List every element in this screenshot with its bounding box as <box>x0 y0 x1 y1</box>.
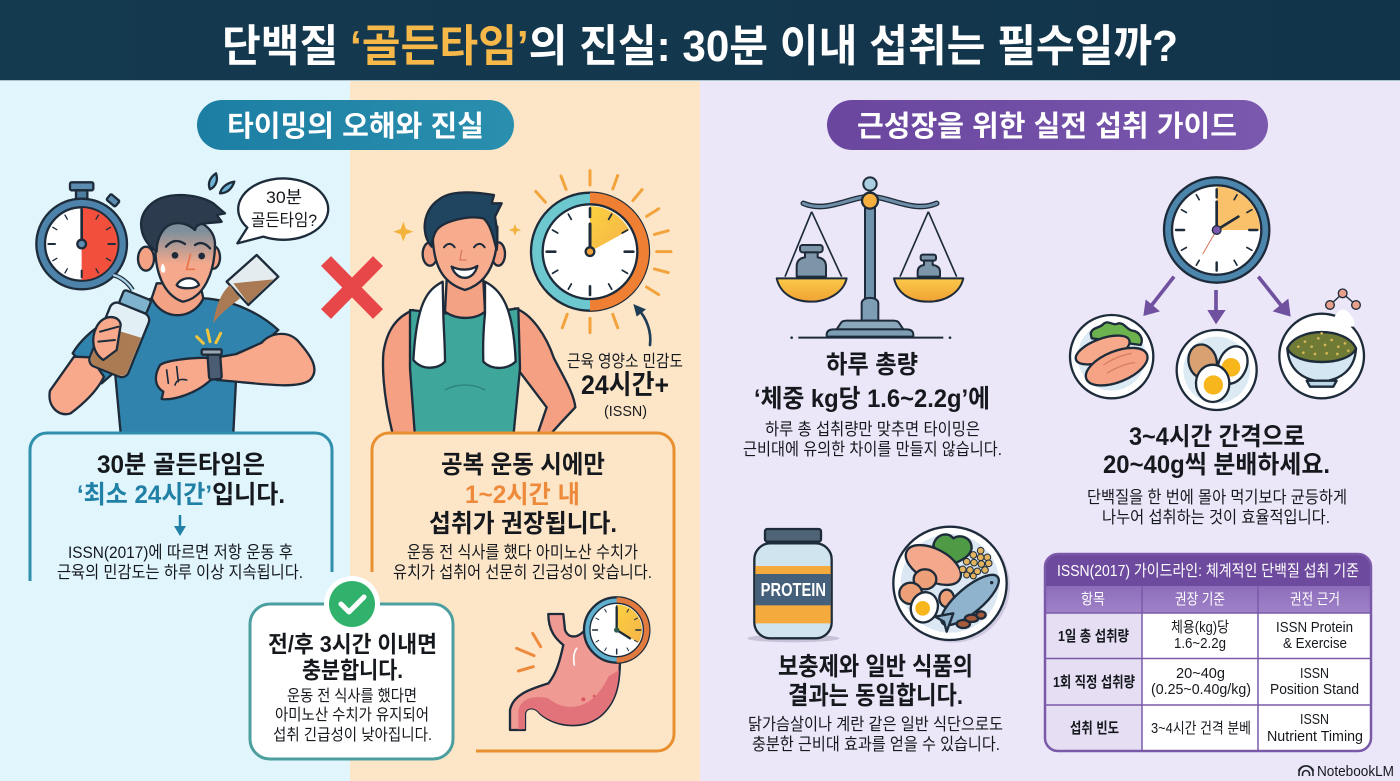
icon: red X <box>326 261 378 314</box>
tank top <box>410 308 520 437</box>
NotebookLM logo: NotebookLM <box>1317 764 1394 780</box>
panel: fasted training card: 유치가 섭취어 선문히 긴급성이 앚습니다. <box>393 563 652 582</box>
illustration: smiling man with towel and clock <box>383 171 671 437</box>
table row: per-meal dose: 20~40g <box>1176 665 1225 682</box>
panel: fasted training card: 운동 전 식사를 했다 아미노산 수치가 <box>407 543 638 562</box>
neck <box>445 280 485 318</box>
table row: frequency: ISSN <box>1300 711 1329 728</box>
protein shaker <box>87 287 157 379</box>
speech bubble text: 골든타임? <box>251 211 317 230</box>
table row: daily total <box>1058 619 1353 652</box>
text block: supplements vs food: 충분한 근비대 효과를 얻을 수 있습니다. <box>752 735 1000 754</box>
text block: meal spacing: 단백질을 한 번에 몰아 먹기보다 균등하게 <box>1087 488 1347 507</box>
panel: 24-hour fact card: 30분 골든타임은 <box>97 451 265 479</box>
sensitivity callout: 근육 영양소 민감도 <box>567 352 683 371</box>
icon: sparkles <box>393 222 521 242</box>
text block: meal spacing <box>1087 423 1347 527</box>
sensitivity callout: (ISSN) <box>604 403 647 420</box>
icon: tipping glass with shake <box>213 255 278 323</box>
icon: sensitivity clock with rays <box>531 171 671 333</box>
arrows to meals <box>1143 277 1291 324</box>
panel: fasted training card: 공복 운동 시에만 <box>441 451 605 479</box>
towel <box>413 282 516 368</box>
panel: right guide background <box>700 80 1400 781</box>
head <box>138 195 225 302</box>
table title: ISSN(2017) 가이드라인: 체계적인 단백질 섭취 기준 <box>1057 562 1359 580</box>
table row: frequency: Nutrient Timing <box>1267 728 1363 745</box>
panel: 24-hour fact card: ‘최소 24시간’입니다. <box>77 481 285 509</box>
heading pill: timing myth and truth <box>197 100 514 150</box>
icon: protein jar <box>747 529 839 642</box>
icon: balance scale <box>777 177 963 339</box>
panel: fasted training card: 1~2시간 내 <box>465 481 580 509</box>
icon: stopwatch <box>36 182 133 290</box>
text block: supplements vs food: 닭가슴살이나 계란 같은 일반 식단으로도 <box>748 715 1003 734</box>
head <box>423 192 505 290</box>
text block: supplements vs food: 결과는 동일합니다. <box>788 682 963 710</box>
illustration: stomach with clock <box>510 597 649 730</box>
panel: within 3 hours card <box>250 576 453 759</box>
icon: grain bowl with molecule <box>1279 289 1364 398</box>
text block: daily total: 하루 총량 <box>826 351 918 379</box>
left arm <box>49 357 104 414</box>
text block: meal spacing: 20~40g씩 분배하세요. <box>1103 451 1330 479</box>
heading pill: timing myth and truth: 타이밍의 오해와 진실 <box>227 110 484 143</box>
right arm with wristwatch <box>156 330 314 399</box>
text block: daily total: 하루 총 섭취량만 맞추면 타이밍은 <box>765 420 980 439</box>
table row: per-meal dose <box>1053 665 1359 698</box>
panel: within 3 hours card: 운동 전 식사를 했다면 <box>287 687 417 705</box>
panel: left truth background <box>350 80 700 781</box>
title: 단백질 ‘골든타임’의 진실: 30분 이내 섭취는 필수일까? <box>222 22 1178 71</box>
sensitivity callout <box>567 352 683 420</box>
text block: daily total: 근비대에 유의한 차이를 만들지 않습니다. <box>743 440 1002 459</box>
table header row <box>1081 591 1340 608</box>
table: ISSN guideline <box>1045 554 1371 751</box>
table row: daily total: 체용(kg)당 <box>1171 619 1229 636</box>
icon: sweat drops <box>209 173 234 193</box>
panel: within 3 hours card: 전/후 3시간 이내면 <box>268 631 437 657</box>
hand on shaker <box>93 317 121 360</box>
text block: daily total: ‘체중 kg당 1.6~2.2g’에 <box>754 385 990 413</box>
speech bubble <box>237 178 328 243</box>
icon: protein jar: PROTEIN <box>761 579 826 600</box>
arms <box>383 308 575 437</box>
speech bubble text <box>251 188 317 230</box>
table row: daily total: 1.6~2.2g <box>1174 635 1226 652</box>
neck <box>152 283 203 315</box>
table row: per-meal dose: ISSN <box>1300 665 1329 682</box>
table header row: 항목 <box>1081 591 1105 608</box>
illustration: protein jar and whole-food plate <box>747 527 1010 643</box>
illustration: clock with meals <box>1070 177 1364 410</box>
panel: left myth background <box>0 80 350 781</box>
icon: clock <box>1164 177 1269 283</box>
icon: chicken plate <box>1070 315 1153 398</box>
text block: supplements vs food <box>748 653 1003 754</box>
table row: per-meal dose: (0.25~0.40g/kg) <box>1151 681 1251 698</box>
icon: whole-food plate <box>893 527 1010 643</box>
shirt <box>73 298 278 433</box>
title banner <box>0 0 1400 81</box>
heading pill: practical guide <box>827 100 1268 150</box>
arrow to clock <box>633 304 650 345</box>
table header row: 권장 기준 <box>1175 591 1225 608</box>
panel: 24-hour fact card <box>30 433 332 582</box>
table row: frequency: 섭취 빈도 <box>1070 720 1119 737</box>
panel: within 3 hours card: 충분합니다. <box>302 657 403 683</box>
table row: frequency: 3~4시간 건격 분베 <box>1151 720 1251 737</box>
sensitivity callout: 24시간+ <box>581 370 669 400</box>
table row: per-meal dose: Position Stand <box>1270 681 1359 698</box>
panel: 24-hour fact card: 근육의 민감도는 하루 이상 지속됩니다. <box>57 563 303 582</box>
text block: meal spacing: 3~4시간 간격으로 <box>1129 423 1305 451</box>
panel: within 3 hours card: 섭취 긴급성이 낮아집니다. <box>273 726 432 744</box>
table row: frequency <box>1070 711 1363 745</box>
illustration: worried man with stopwatch <box>36 173 328 433</box>
table row: daily total: ISSN Protein <box>1276 619 1353 636</box>
panel: fasted training card <box>372 433 674 751</box>
speech bubble text: 30분 <box>266 188 302 207</box>
heading pill: practical guide: 근성장을 위한 실전 섭취 가이드 <box>857 110 1237 143</box>
icon: green check <box>324 576 380 632</box>
text block: meal spacing: 나누어 섭취하는 것이 효율적입니다. <box>1102 508 1330 527</box>
text block: daily total <box>743 351 1002 459</box>
table row: per-meal dose: 1회 직정 섭취량 <box>1053 674 1135 691</box>
table row: daily total: 1일 총 섭취량 <box>1058 628 1129 645</box>
panel: within 3 hours card: 아미노산 수치가 유지되어 <box>275 706 429 724</box>
panel: 24-hour fact card: ISSN(2017)에 따르면 저항 운동 후 <box>68 543 293 562</box>
table row: daily total: & Exercise <box>1283 635 1347 652</box>
panel: fasted training card: 섭취가 권장됩니다. <box>429 510 617 538</box>
arrow down <box>174 515 186 536</box>
icon: eggs plate <box>1177 330 1257 410</box>
table header row: 권전 근거 <box>1290 591 1340 608</box>
text block: supplements vs food: 보충제와 일반 식품의 <box>778 653 973 681</box>
